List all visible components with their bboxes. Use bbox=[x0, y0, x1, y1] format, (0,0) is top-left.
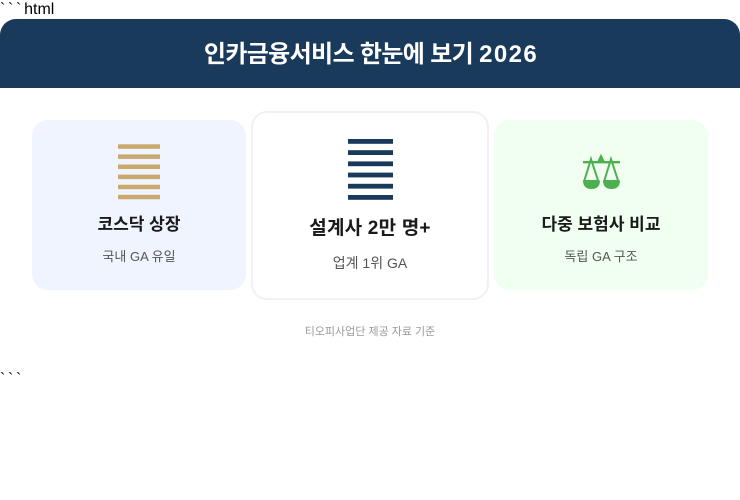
panel: multi-insurer comparison bbox=[494, 120, 708, 290]
stray code fence closing text: ``` bbox=[0, 371, 24, 388]
text: number one GA in industry: 업계 1위 GA bbox=[333, 255, 407, 271]
heading: multi-insurer comparison: 다중 보험사 비교 bbox=[542, 215, 660, 234]
panel: KOSDAQ listing bbox=[32, 120, 246, 290]
header banner bbox=[0, 19, 740, 88]
panel: 20,000+ planners bbox=[251, 111, 489, 300]
text: independent GA structure: 독립 GA 구조 bbox=[564, 249, 638, 264]
text: only GA in Korea: 국내 GA 유일 bbox=[102, 249, 176, 264]
stray code fence opening text: ```html bbox=[0, 1, 54, 18]
icon: navy bars bbox=[348, 139, 393, 200]
icon: gold bars bbox=[118, 144, 160, 200]
heading: 20,000+ planners: 설계사 2만 명+ bbox=[309, 218, 431, 239]
heading: KOSDAQ listing: 코스닥 상장 bbox=[98, 215, 180, 234]
icon: balance scale bbox=[582, 154, 620, 189]
title: 인카금융서비스 한눈에 보기 2026 bbox=[204, 41, 538, 68]
footnote: source: 티오피사업단 제공 자료 기준 bbox=[305, 326, 435, 338]
